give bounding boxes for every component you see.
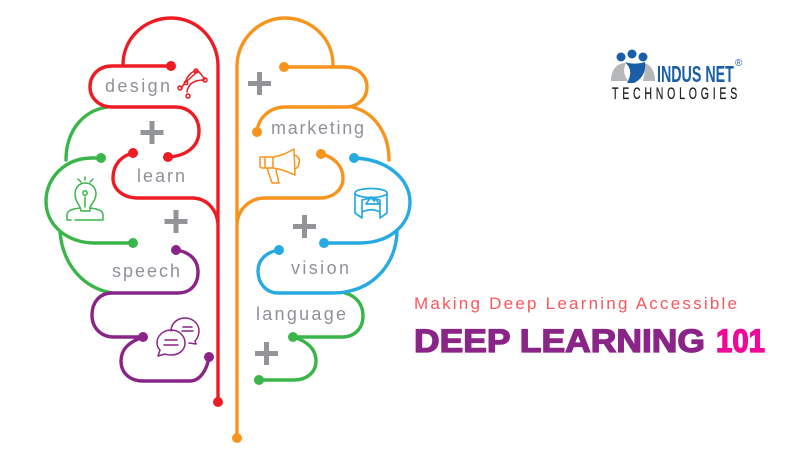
right brain: green lines (254, 293, 363, 385)
icon: speech bubbles (157, 318, 199, 356)
logo wordmark: Technologies: TECHNOLOGIES (612, 83, 737, 103)
logo people icon (611, 50, 655, 83)
logo wordmark: Indus Net: INDUS NET (657, 63, 734, 88)
title: Deep Learning: DEEP LEARNING (414, 323, 705, 359)
right brain: blue lines (258, 153, 410, 293)
left brain: purple lines (92, 245, 214, 381)
label: speech: speech (112, 261, 180, 281)
icon: megaphone (260, 149, 299, 183)
logo: Indus Net Technologies (611, 50, 743, 103)
icon: 360 panorama (355, 188, 387, 218)
icon: person with light bulb (67, 177, 103, 220)
label: vision: vision (291, 258, 349, 278)
label: design: design (105, 76, 170, 96)
plus sign: marketing (293, 215, 316, 238)
subtitle: Making Deep Learning Accessible (414, 294, 737, 313)
icon: design bezier curve (178, 69, 207, 98)
right brain: orange lines (232, 18, 389, 443)
plus sign: top right (248, 72, 271, 95)
left brain: green lines (46, 107, 138, 293)
logo registered mark: ® (735, 58, 743, 69)
title (414, 323, 765, 359)
plus sign: learn (164, 210, 188, 233)
label: learn: learn (137, 166, 185, 186)
title: 101: 101 (716, 323, 765, 359)
label: language: language (256, 304, 346, 324)
left brain: red lines (90, 18, 223, 407)
label: marketing: marketing (271, 118, 364, 138)
plus sign: language (255, 342, 278, 365)
plus sign: design (140, 121, 164, 144)
